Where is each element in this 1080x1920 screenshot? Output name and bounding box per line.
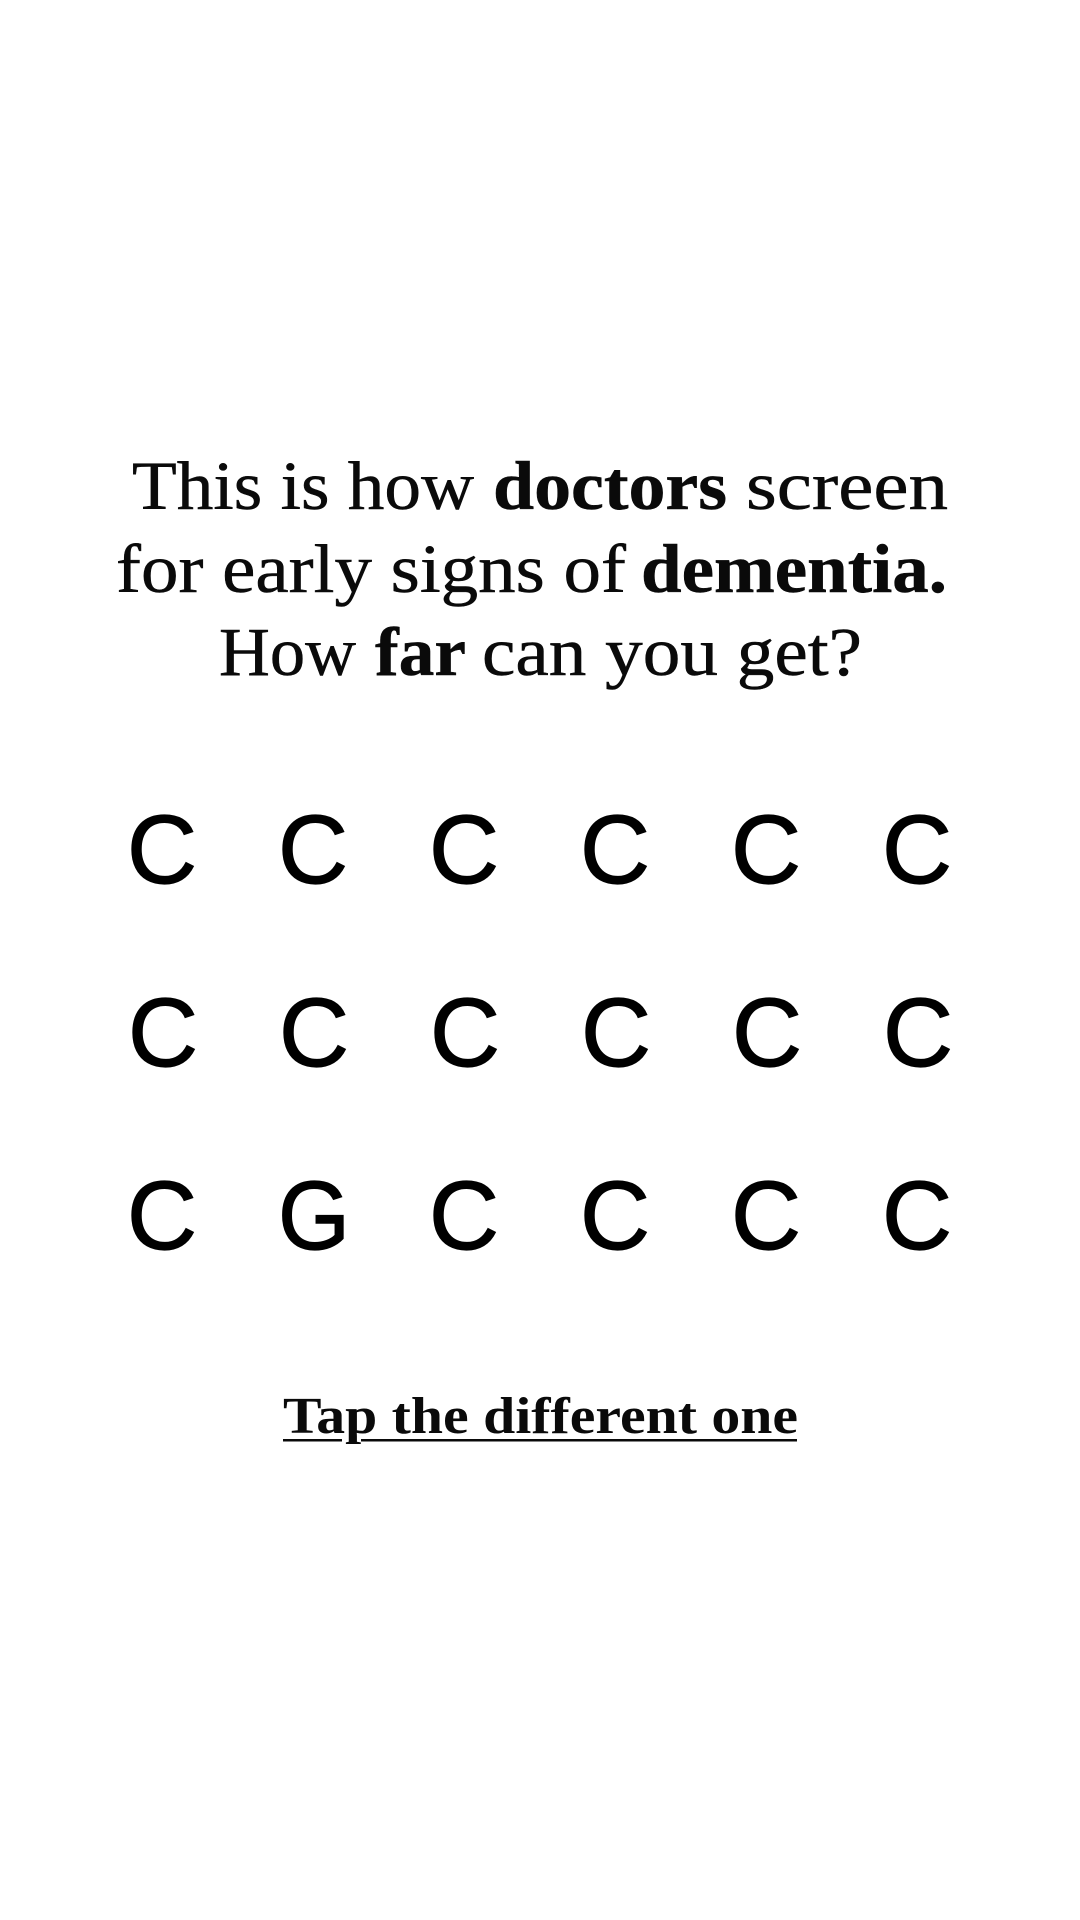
row 2 of letters: C bbox=[430, 978, 500, 1087]
row 3 of letters with the different G: C bbox=[731, 1161, 801, 1270]
row 1 of letters: C bbox=[127, 795, 197, 904]
row 3 of letters with the different G: C bbox=[580, 1161, 650, 1270]
row 1 of letters: C bbox=[429, 795, 499, 904]
row 3 of letters with the different G: C bbox=[127, 1161, 197, 1270]
title: How bbox=[219, 614, 356, 690]
row 1 of letters: C bbox=[731, 795, 801, 904]
row 1 of letters: C bbox=[580, 795, 650, 904]
row 3 of letters with the different G: C bbox=[882, 1161, 952, 1270]
row 2 of letters: C bbox=[883, 978, 953, 1087]
row 1 of letters: C bbox=[278, 795, 348, 904]
row 1 of letters bbox=[127, 795, 952, 904]
title bbox=[116, 448, 948, 690]
letter grid bbox=[127, 795, 953, 1270]
row 3 of letters with the different G: G bbox=[278, 1161, 350, 1270]
row 2 of letters: C bbox=[732, 978, 802, 1087]
row 3 of letters with the different G: C bbox=[429, 1161, 499, 1270]
row 2 of letters bbox=[128, 978, 953, 1087]
title: for early signs of bbox=[116, 531, 626, 607]
row 2 of letters: C bbox=[279, 978, 349, 1087]
title: dementia. bbox=[641, 531, 947, 607]
title: can you get? bbox=[482, 614, 862, 690]
title: doctors bbox=[493, 448, 727, 524]
call to action: tap the different one: Tap the different one bbox=[283, 1388, 798, 1445]
title: screen bbox=[746, 448, 948, 524]
row 2 of letters: C bbox=[128, 978, 198, 1087]
title: This is how bbox=[132, 448, 474, 524]
row 2 of letters: C bbox=[581, 978, 651, 1087]
title: far bbox=[375, 614, 466, 690]
row 3 of letters with the different G bbox=[127, 1161, 952, 1270]
row 1 of letters: C bbox=[882, 795, 952, 904]
